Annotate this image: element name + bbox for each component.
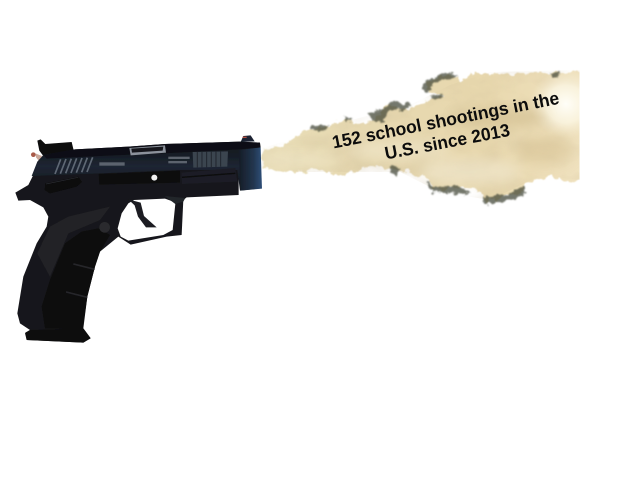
takedown pin [151,175,157,181]
pistol [15,135,262,343]
ejection port [129,145,166,155]
slide lever [45,177,82,193]
smoke texture [299,70,580,198]
magazine catch [99,222,110,233]
rear sight [37,139,74,156]
smoke body [263,72,587,201]
smoke shading [260,108,573,185]
caption line 1: 152 school shootings in the [330,88,561,152]
infographic canvas [15,70,580,343]
grip texture [42,228,110,329]
slide [32,142,262,191]
frame rail [99,171,180,185]
smoke caption [330,88,561,163]
smoke highlight [536,75,580,132]
grip ridges [66,264,95,297]
rear serrations [55,157,93,174]
trigger [128,199,157,227]
grip sheen [37,207,110,277]
hammer [31,152,36,157]
frame and grip [15,167,239,343]
guard front [165,196,185,204]
caption line 2: U.S. since 2013 [383,120,512,163]
slide top edge [43,142,261,159]
smoke dark wisps [310,72,560,204]
front serrations [193,151,228,168]
magazine base [25,328,91,343]
slide markings [99,157,190,166]
muzzle [239,147,262,191]
front sight [241,135,255,142]
smoke cloud [260,70,602,205]
trigger guard opening [118,199,175,241]
